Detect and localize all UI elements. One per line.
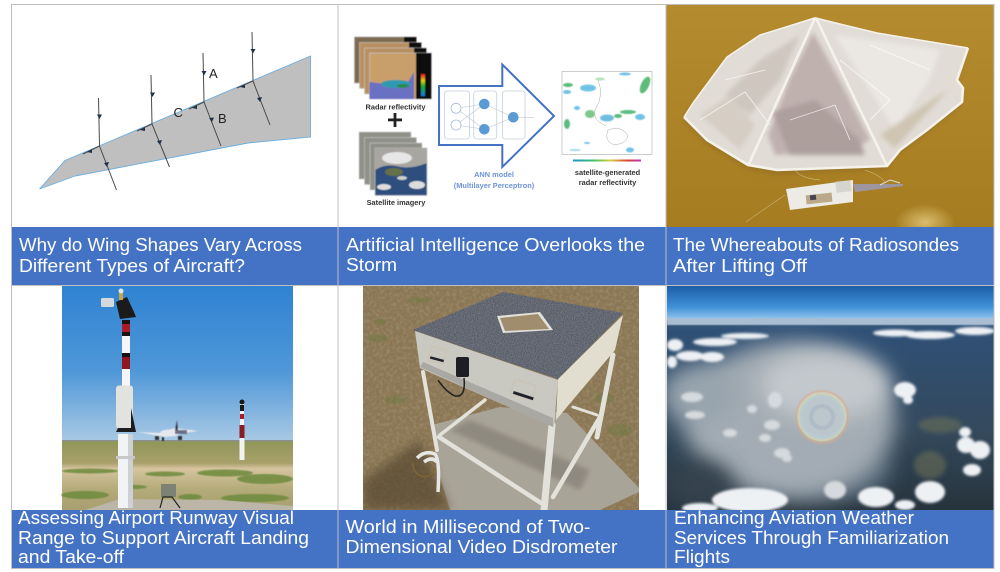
banner: runway visual range: and Take-off: [18, 546, 125, 567]
banner: disdrometer: [338, 510, 666, 568]
wing diagram: A: [209, 66, 218, 81]
map label: [575, 168, 641, 187]
disdrometer frame: [413, 292, 623, 510]
banner: radiosondes: The Whereabouts of Radiosondes: [673, 234, 959, 255]
banner: wing shapes: Different Types of Aircraft?: [19, 255, 245, 276]
banner: disdrometer: World in Millisecond of Two-: [346, 516, 590, 537]
banner: familiarization flights: Flights: [674, 546, 730, 567]
banner: runway visual range: Range to Support Aircraft Landing: [18, 527, 309, 548]
airplane: [137, 420, 198, 441]
banner: wing shapes: Why do Wing Shapes Vary Across: [19, 234, 302, 255]
connector and cables: [456, 357, 469, 377]
panel: disdrometer photo: [363, 286, 639, 510]
map label: radar reflectivity: [579, 178, 637, 187]
panel: AI storm: [338, 5, 666, 227]
radar reflectivity frames: [354, 37, 432, 99]
clouds: [662, 327, 995, 513]
banner: familiarization flights: Enhancing Aviation Weather: [674, 507, 914, 528]
near sensor pole: [101, 288, 136, 508]
neural network diagram: [444, 91, 534, 139]
ANN arrow: [439, 64, 554, 167]
panel: familiarization flight photo: [662, 286, 995, 513]
ground vegetation: [61, 468, 293, 502]
banner: AI storm: Artificial Intelligence Overlooks the: [346, 234, 645, 255]
ANN label: [454, 170, 535, 190]
concrete pad: [432, 407, 639, 510]
banner: AI storm: Storm: [346, 254, 397, 275]
panel: runway visual range photo: [12, 286, 338, 510]
map label: satellite-generated: [575, 168, 641, 177]
banner: familiarization flights: Services Through Familiarization: [674, 527, 949, 548]
glory ring: [796, 391, 848, 443]
banner: runway visual range: [12, 507, 338, 568]
ANN label: (Multilayer Perceptron): [454, 181, 535, 190]
plus sign: [388, 113, 402, 127]
panel: radiosonde parachute photo: [666, 5, 994, 240]
ANN label: ANN model: [474, 170, 514, 179]
far sensor pole: [240, 400, 244, 460]
radar label: Radar reflectivity: [366, 102, 426, 112]
banner: radiosondes: After Lifting Off: [673, 255, 808, 276]
wing diagram: C: [174, 105, 183, 120]
banner: runway visual range: Assessing Airport Runway Visual: [18, 507, 294, 528]
panel: wing shapes: [12, 5, 338, 227]
banner: disdrometer: Dimensional Video Disdrometer: [346, 536, 618, 557]
banner: familiarization flights: [666, 507, 994, 568]
handles: [427, 346, 536, 400]
parachute: [683, 17, 968, 175]
satellite imagery frames: [359, 132, 427, 196]
radiosonde device: [746, 170, 903, 222]
banner: wing shapes: [12, 227, 338, 285]
satellite label: Satellite imagery: [367, 198, 426, 207]
ground instrument box: [160, 484, 180, 508]
wing diagram: B: [218, 111, 227, 126]
satellite-generated radar map: [562, 72, 652, 162]
wing diagram: [40, 32, 310, 190]
banner: AI storm: [338, 227, 666, 285]
banner: radiosondes: [666, 227, 994, 285]
